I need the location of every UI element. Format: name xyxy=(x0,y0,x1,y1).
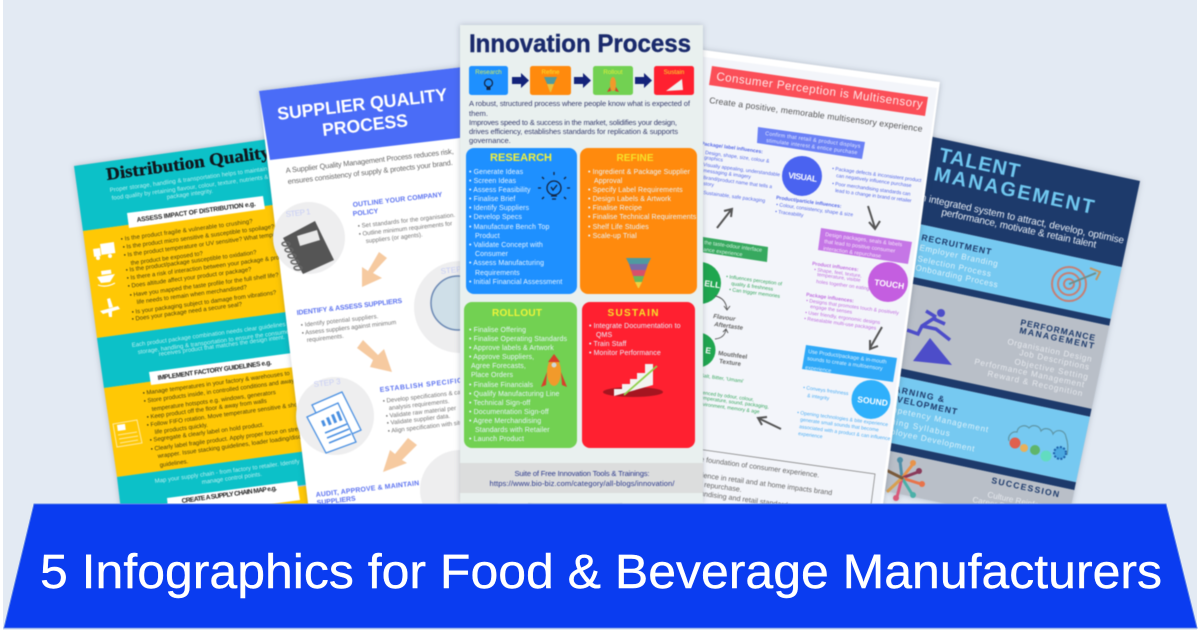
arrow xyxy=(512,73,529,88)
text: intro: A Supplier Quality Management Process reduces risk, xyxy=(285,147,454,175)
callout: design packages: that lead to positive consumer xyxy=(824,239,896,255)
text: product influences: • Colour, consistency, shape & size xyxy=(776,202,854,218)
step 1 circle with notebook icon xyxy=(273,202,345,274)
step 4 text: AUDIT, APPROVE & MAINTAIN xyxy=(315,480,420,499)
panel: innovation process infographic xyxy=(460,25,703,503)
text: package influences: • Resealable multi-use packages xyxy=(804,316,877,332)
text: sound note two: generate small sounds that become xyxy=(800,417,879,434)
step 2 text: requirements. xyxy=(306,333,345,344)
list: factory guidelines: • Clearly label fragile product. Apply proper force on stretch xyxy=(150,426,306,453)
arrow: sound to smell xyxy=(758,417,781,429)
list: sustain steps xyxy=(589,323,681,357)
text box: foundation of consumer experience: Merchandising and retail standards xyxy=(680,486,792,510)
list: research steps: • Develop Specs xyxy=(469,214,522,221)
text: smell notes: quality & freshness xyxy=(731,281,774,293)
text: product influences: • Traceability xyxy=(775,209,804,219)
heading: supplier quality process xyxy=(276,84,448,140)
step 4 circle xyxy=(420,450,500,530)
icon: visual circle: VISUAL xyxy=(788,170,818,184)
text: flavour aftertaste: Flavour xyxy=(713,313,736,323)
panel: distribution quality infographic xyxy=(74,132,320,520)
panel: refine xyxy=(580,148,697,294)
section: succession: Career Development xyxy=(972,495,1048,520)
text: package influences: engage the senses xyxy=(810,304,853,316)
list: factory guidelines: guidelines. xyxy=(159,459,189,469)
step 3 text: ESTABLISH SPECIFICATIONS xyxy=(379,374,492,394)
label: implement factory guidelines xyxy=(149,353,294,385)
callout: retail and product displays xyxy=(757,127,865,159)
callout: product package sounds: experience xyxy=(805,365,832,375)
text: mouthfeel texture: Texture xyxy=(719,358,742,368)
list: rollout steps xyxy=(469,327,567,443)
icon: circle of people xyxy=(886,457,925,501)
text: flavour aftertaste: Aftertaste xyxy=(713,321,744,332)
list: assess impact questions xyxy=(120,219,302,323)
text: sound note one: & integrity xyxy=(807,393,830,402)
banner title: 5 Infographics for Food & Beverage Manufacturers xyxy=(40,546,1162,599)
section: learning and development xyxy=(873,381,990,454)
heading: talent management: MANAGEMENT xyxy=(932,163,1096,219)
text: flavour aftertaste xyxy=(713,313,744,332)
panel: sustain xyxy=(582,302,695,448)
callout: design packages: Design packages, seals & labels xyxy=(825,232,903,248)
list: research steps: • Generate Ideas xyxy=(469,169,524,176)
list: assess impact questions: life needs to remain when merchandised? xyxy=(136,285,248,306)
list: sustain steps: QMS xyxy=(596,332,612,339)
label: create a supply chain map: CREATE A SUPPLY CHAIN MAP e.g. xyxy=(181,485,278,505)
panel: consumer perception infographic xyxy=(620,47,940,520)
list: sustain steps: • Monitor Performance xyxy=(589,350,661,357)
icon: rocket xyxy=(541,354,567,387)
process step: sustain: Sustain xyxy=(664,69,685,76)
label: create a supply chain map xyxy=(167,481,300,518)
callout: taste odour interface: the taste-odour interface xyxy=(704,240,762,254)
step 1 text: • Outline minimum requirements for xyxy=(358,220,453,238)
text: process description: them. xyxy=(469,109,488,118)
text: package label influences: Visually appealing, understandable xyxy=(703,162,781,178)
step 2 circle with globe icon: STEP 2 xyxy=(440,264,469,276)
section: recruitment: Selection Process xyxy=(917,254,992,279)
step 1 text xyxy=(352,192,456,245)
list: refine steps: • Ingredient & Package Supplier xyxy=(588,169,691,176)
panel: research xyxy=(466,148,577,294)
text: intro: Proper storage, handling & transportation helps to maintain xyxy=(109,166,268,194)
callout: product package sounds: Use Product/package & in-mouth xyxy=(808,349,887,366)
list: refine steps: • Specify Label Requirements xyxy=(588,187,683,194)
text box: foundation of consumer experience: The foundation of consumer experience. xyxy=(691,453,820,480)
section: performance management xyxy=(974,317,1096,398)
list: research steps: • Screen Ideas xyxy=(469,178,516,185)
list: rollout steps: • Approve labels & Artwork xyxy=(469,345,554,352)
process step: rollout xyxy=(593,66,633,95)
heading: consumer perception is multisensory: Consumer Perception is Multisensory xyxy=(716,70,924,111)
text: package label influences: Package/ label influences: xyxy=(701,141,764,155)
list: research steps: • Finalise Brief xyxy=(469,196,515,203)
list: refine steps: • Finalise Recipe xyxy=(588,205,642,212)
list: rollout steps: • Launch Product xyxy=(469,436,524,443)
arrow: step 1 to step 2 xyxy=(362,252,387,287)
text: process description xyxy=(469,99,691,145)
list: rollout steps: • Qualify Manufacturing Line xyxy=(469,391,559,398)
process step: rollout: Rollout xyxy=(603,69,623,76)
list: research steps: • Validate Concept with xyxy=(469,242,543,249)
heading: talent management: TALENT xyxy=(937,144,1022,183)
list: sustain steps: • Integrate Documentation to xyxy=(589,323,681,330)
icon: visual circle xyxy=(782,156,822,196)
heading: innovation process: Innovation Process xyxy=(469,30,691,58)
text: sound note one: • Conveys freshness xyxy=(803,385,849,397)
arrow xyxy=(574,73,591,88)
text: package label influences: Sustainable, safe packaging xyxy=(703,190,766,204)
list: research steps: Requirements xyxy=(475,270,520,277)
process step: refine xyxy=(530,66,571,95)
icon: ship xyxy=(97,270,115,286)
callout: taste odour interface xyxy=(688,235,768,262)
list: rollout steps: • Finalise Offering xyxy=(469,327,526,334)
text: talent management summary: performance, motivate & retain talent xyxy=(940,207,1097,251)
step 4 text: SUPPLIERS xyxy=(316,495,356,507)
text: process description: Improves speed to & success in the market, solidifies your design, xyxy=(469,118,677,127)
list: research steps: Consumer xyxy=(475,251,509,258)
text: product influences xyxy=(775,195,854,219)
text: package guidelines note: Each product package combination needs clear guidelines for xyxy=(131,321,295,349)
footer: suite of free innovation tools: Suite of Free Innovation Tools & Trainings: xyxy=(514,469,650,478)
text box: foundation of consumer experience xyxy=(680,448,875,520)
text: taste notes xyxy=(671,369,769,415)
text: touch product influences: holes together on eating xyxy=(816,279,870,292)
arrow: touch to sound xyxy=(870,327,882,349)
heading: distribution quality: Distribution Quality xyxy=(105,142,271,184)
panel: talent management infographic xyxy=(802,125,1140,529)
callout: design packages xyxy=(818,228,912,264)
section: performance management: Organisation Design xyxy=(1007,337,1093,364)
step 2 text: IDENTIFY & ASSESS SUPPLIERS xyxy=(296,298,403,317)
text: package influences: • User friendly, ergonomic designs xyxy=(805,310,881,326)
icon: taste circle: E xyxy=(705,345,712,356)
step 3 text: • Develop specifications & calibrate xyxy=(382,387,478,405)
list: rollout steps: Standards with Retailer xyxy=(475,427,550,434)
text: intro: ensures consistency of supply & protects your brand. xyxy=(287,158,453,186)
section: succession: Culture Reinforcement xyxy=(987,490,1069,516)
text: intro: food quality by retaining flavour, colour, texture, nutrients & xyxy=(111,175,269,202)
footer: suite of free innovation tools xyxy=(460,463,703,493)
text: process description: A robust, structured process where people know what is expected of xyxy=(469,99,691,108)
arrow: taste to flavour xyxy=(715,329,728,339)
text: package label influences: Brand/product name that tells a xyxy=(703,175,773,190)
section: recruitment xyxy=(915,232,999,289)
list: refine steps xyxy=(588,169,697,240)
label: assess impact: ASSESS IMPACT OF DISTRIBUTION e.g. xyxy=(136,201,256,224)
step 2 circle with globe icon xyxy=(414,261,506,353)
list: refine steps: • Shelf Life Studies xyxy=(588,224,649,231)
list: rollout steps: • Agree Merchandising xyxy=(469,418,541,425)
icon: truck xyxy=(93,242,115,260)
section: learning and development: DEVELOPMENT xyxy=(883,391,959,417)
icon: touch circle xyxy=(868,262,908,302)
step 3 text: • Validate raw material per xyxy=(385,405,457,420)
icon: runner on mountain xyxy=(907,309,952,365)
text: supply chain note: Map your supply chain - from factory to retailer. Identify xyxy=(154,459,300,485)
list: factory guidelines: life products quickly. xyxy=(154,423,209,436)
list: assess impact questions: • Does altitude affect your product or package? xyxy=(127,267,253,290)
list: factory guidelines: • Segregate & clearly label on hold product. xyxy=(149,422,265,444)
text: package label influences xyxy=(701,141,781,204)
list: refine steps: • Scale-up Trial xyxy=(588,233,637,240)
process step: refine: Refine xyxy=(542,69,560,76)
text: visual notes: • Package defects & inconsistent product xyxy=(832,166,922,184)
arrow: smell to visual xyxy=(717,209,732,228)
banner xyxy=(4,504,1197,628)
list: research steps: • Initial Financial Assessment xyxy=(469,279,562,286)
arrow: step 3 to step 4 xyxy=(383,438,417,472)
text: package label influences: graphics xyxy=(704,155,724,164)
list: sustain steps: • Train Staff xyxy=(589,341,626,348)
text: subtitle: Create a positive, memorable multisensory experience xyxy=(709,95,923,134)
list: rollout steps: • Finalise Financials xyxy=(469,382,533,389)
text: sound note two: associated with a product & can influence xyxy=(799,424,891,442)
section: learning and development: Training Syllabus xyxy=(873,413,951,438)
icon: plane xyxy=(100,298,120,317)
list: factory guidelines: • Manage temperatures in your factory & warehouses to xyxy=(142,371,291,397)
footer: suite of free innovation tools: https://www.bio-biz.com/category/all-blogs/innovation/ xyxy=(490,479,675,488)
heading: supplier quality process: SUPPLIER QUALITY xyxy=(276,84,448,124)
step 1 text: POLICY xyxy=(352,208,379,218)
text: touch product influences xyxy=(812,261,870,292)
text: smell notes: • Can trigger memories xyxy=(729,287,781,300)
step 2 text xyxy=(296,298,403,344)
icon: light bulb xyxy=(538,172,570,199)
section: recruitment: RECRUITMENT xyxy=(921,232,993,257)
text: intro: package integrity. xyxy=(166,189,214,201)
section: performance management: PERFORMANCE xyxy=(1020,317,1096,343)
label: assess impact xyxy=(127,196,265,228)
step 3 text xyxy=(379,374,492,435)
section: performance management: Performance Management xyxy=(974,357,1086,389)
callout: taste odour interface: ance experience xyxy=(703,247,743,258)
text: visual notes: • Poor merchandising standards can xyxy=(832,181,911,198)
step 3 text: analysis requirements. xyxy=(388,398,450,412)
section: performance management: MANAGEMENT xyxy=(1019,325,1096,351)
list: assess impact questions: the product be exposed to? xyxy=(130,251,204,267)
text: package guidelines note: storage, handling & transportation to ensure the consumer xyxy=(137,329,292,356)
step 3 circle with documents icon xyxy=(296,377,374,455)
list: rollout steps: • Technical Sign-off xyxy=(469,400,530,407)
text box: foundation of consumer experience: Experience in retail and at home impacts brand xyxy=(683,468,833,497)
icon: sound circle: SOUND xyxy=(857,394,888,408)
process step: research xyxy=(469,66,508,95)
text: package label influences: Design, shape, size, colour & xyxy=(705,150,770,165)
text: visual notes: lead to a change in brand or retailer xyxy=(835,188,912,204)
panel: rollout: ROLLOUT xyxy=(492,308,542,319)
text box: foundation of consumer experience: and repurchase. xyxy=(690,478,742,494)
list: assess impact questions: • Is the product/package susceptible to oxidation? xyxy=(125,250,258,274)
list: research steps: • Identify Suppliers xyxy=(469,205,529,212)
text: taste notes: temperature, sound, packaging, xyxy=(699,395,769,410)
icon: documents xyxy=(113,420,142,447)
icon: touch circle: TOUCH xyxy=(874,277,905,291)
section: performance management: Job Descriptions xyxy=(1019,348,1090,372)
text: package label influences: story xyxy=(703,181,715,189)
list: assess impact questions: • Is the product fragile & vulnerable to crushing? xyxy=(120,219,254,243)
text: touch product influences: Product influences: xyxy=(812,261,859,273)
list: assess impact questions: • Is your packaging subject to damage from vibrations? xyxy=(131,290,277,316)
text: package influences xyxy=(804,292,900,332)
icon: funnel xyxy=(626,258,651,288)
text: touch product influences: temperature, visible xyxy=(817,272,861,284)
icon: target with arrow xyxy=(1052,267,1100,301)
list: rollout steps: Agree Forecasts, xyxy=(471,363,526,370)
text: visual notes: can negatively influence purchase xyxy=(836,173,912,189)
list: assess impact questions: • Does your package need a secure seal? xyxy=(131,302,243,323)
section: recruitment: Employer Branding xyxy=(919,243,999,269)
text: supply chain note: manage control points. xyxy=(201,472,263,486)
section: performance management: Reward & Recognition xyxy=(987,369,1084,398)
text: sound note two: experience xyxy=(798,431,823,440)
text: sound note two: • Opening technologies & bite experience xyxy=(797,410,888,428)
list: factory guidelines: temperature hotspots e.g. windows, generators xyxy=(151,390,276,413)
list: refine steps: • Design Labels & Artwork xyxy=(588,196,672,203)
section: recruitment: Onboarding Process xyxy=(915,263,999,289)
list: factory guidelines: • Follow FIFO rotation. Move temperature sensitive & short shelf xyxy=(146,400,316,429)
arrow xyxy=(635,73,652,88)
step 3 circle with documents icon: STEP 3 xyxy=(313,377,342,389)
list: factory guidelines: • Keep product off the floor & away from walls xyxy=(146,399,267,421)
text: touch product influences: • Shape, feel, texture, xyxy=(814,267,862,279)
text: package label influences: messaging & imagery xyxy=(703,168,752,180)
list: research steps xyxy=(469,169,562,286)
icon: sound circle xyxy=(852,380,890,419)
text: package guidelines note: receives product that matches the design intent. xyxy=(158,335,286,358)
list: rollout steps: • Documentation Sign-off xyxy=(469,409,549,416)
list: rollout steps: • Finalise Operating Standards xyxy=(469,336,567,343)
arrow: step 2 to step 3 xyxy=(357,340,392,372)
list: research steps: Product xyxy=(475,233,500,240)
list: research steps: • Assess Manufacturing xyxy=(469,260,544,267)
icon: cloud and gears xyxy=(1009,426,1068,462)
icon: smell circle xyxy=(679,262,721,304)
section: performance management: Objective Setting xyxy=(1014,357,1089,382)
panel: refine: REFINE xyxy=(616,153,654,164)
list: rollout steps: Place Orders xyxy=(471,372,513,379)
text: process description: drives efficiency, establishes standards for replication & supports xyxy=(469,127,678,136)
text: smell notes xyxy=(726,274,783,300)
callout: retail and product displays: Confirm that retail & product displays xyxy=(765,131,861,150)
arrow: visual to touch xyxy=(868,206,880,229)
list: factory guidelines: • Store products inside, in controlled conditions and away from xyxy=(143,377,308,405)
list: factory guidelines: wrapper. Issue stacking guidelines, loader loading/discharge xyxy=(156,432,318,460)
text: process description: governance. xyxy=(469,136,511,145)
text: mouthfeel texture xyxy=(718,350,748,368)
callout: retail and product displays: stimulate interest & entice purchase xyxy=(766,138,858,156)
list: research steps: • Manufacture Bench Top xyxy=(469,224,550,231)
icon: rising stairs chart xyxy=(603,364,663,397)
step 2 text: • Identify potential suppliers. xyxy=(300,313,379,329)
text: taste notes: Influenced by odour, colour, xyxy=(693,389,754,403)
text: talent management summary: An integrated system to attract, develop, optimise xyxy=(913,191,1125,247)
text: visual notes xyxy=(832,166,922,204)
text: taste notes: Sweet, Sour, Salt, Bitter, 'Umami' xyxy=(671,369,744,385)
step 3 text: • Align specification with site xyxy=(387,419,464,435)
arrow: smell to flavour xyxy=(715,296,730,310)
list: refine steps: Approval xyxy=(594,178,623,185)
panel: rollout xyxy=(464,302,577,448)
text: product influences: Product/particle influences: xyxy=(776,195,842,210)
icon: taste circle xyxy=(680,332,716,368)
step 2 text: • Assess suppliers against minimum xyxy=(301,319,397,337)
text: package influences: • Designs that promotes touch & positively xyxy=(806,298,900,317)
label: implement factory guidelines: IMPLEMENT FACTORY GUIDELINES e.g. xyxy=(157,359,272,382)
list: rollout steps: • Approve Suppliers, xyxy=(469,354,534,361)
section: learning and development: LEARNING & xyxy=(881,381,945,404)
list: assess impact questions: • Have you mapped the taste profile for the full shelf life? xyxy=(129,273,280,299)
section: learning and development: Employee Development xyxy=(877,424,976,454)
list: refine steps: • Finalise Technical Requirements xyxy=(588,214,697,221)
callout: product package sounds xyxy=(802,345,897,382)
step 1 circle with notebook icon: STEP 1 xyxy=(285,207,312,219)
heading: supplier quality process: PROCESS xyxy=(321,110,409,140)
step 1 text: • Set standards for the organisation. xyxy=(357,212,456,230)
text: package influences: Package influences: xyxy=(806,292,855,304)
process step: sustain xyxy=(654,66,694,95)
list: factory guidelines xyxy=(142,371,318,469)
step 1 text: OUTLINE YOUR COMPANY xyxy=(352,192,443,209)
process step: research: Research xyxy=(475,69,502,76)
list: research steps: • Assess Feasibility xyxy=(469,187,531,194)
step 3 text: • Validate supplier data. xyxy=(386,413,451,427)
section: succession xyxy=(972,475,1069,520)
list: assess impact questions: • Is the product temperature or UV sensitive? What temperature will xyxy=(123,229,302,259)
text: taste notes: environment, memory & age xyxy=(697,401,760,415)
icon: smell circle: ELL xyxy=(704,278,721,290)
list: assess impact questions: • Is the product micro sensitive & susceptible to spoilage? xyxy=(122,224,275,251)
section: succession: SUCCESSION xyxy=(991,475,1060,499)
text: smell notes: • Influences perception of xyxy=(726,274,783,288)
panel: research: RESEARCH xyxy=(490,152,552,164)
text: mouthfeel texture: Mouthfeel xyxy=(718,350,748,361)
list: assess impact questions: • Is there a risk of interaction between your package & product? xyxy=(126,253,295,282)
text: sound note two xyxy=(797,410,891,442)
panel: sustain: SUSTAIN xyxy=(608,308,658,319)
panel: supplier quality process infographic xyxy=(259,65,530,530)
section: learning and development: Competency Management xyxy=(878,402,990,434)
callout: design packages: interaction & repurchase xyxy=(823,246,881,260)
callout: product package sounds: sounds to create a multisensory xyxy=(807,356,883,372)
step 1 text: suppliers (or agents). xyxy=(365,231,423,245)
